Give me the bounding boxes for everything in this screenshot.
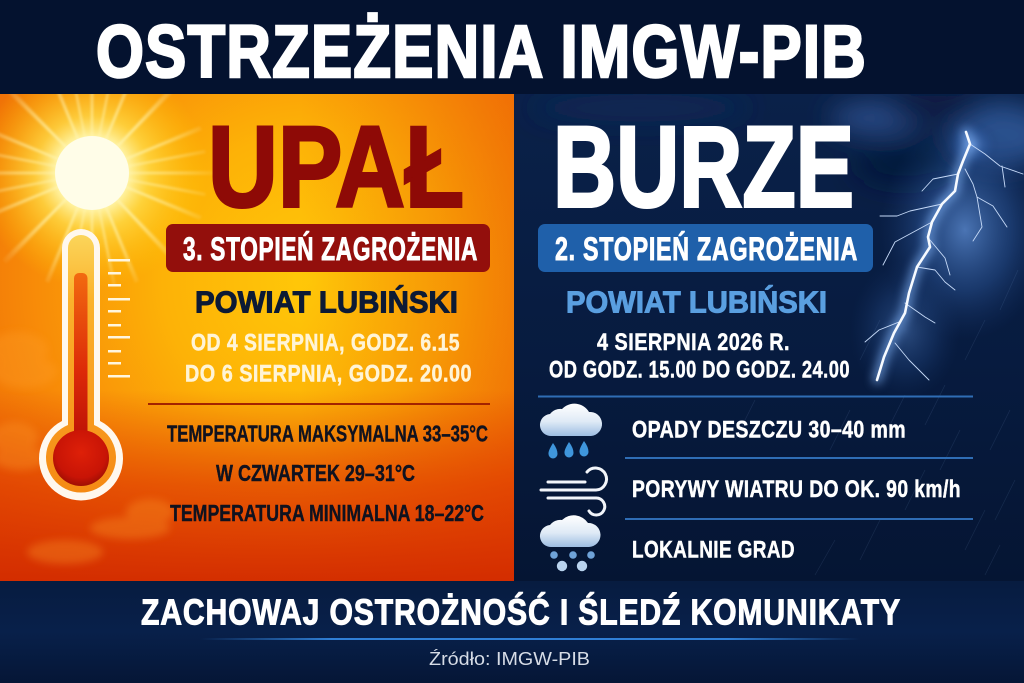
icon: thermometer xyxy=(39,229,130,500)
badge: level 2: 2. STOPIEŃ ZAGROŻENIA xyxy=(555,231,858,267)
opady text: OPADY DESZCZU 30–40 mm xyxy=(632,416,906,444)
footer call to action: ZACHOWAJ OSTROŻNOŚĆ I ŚLEDŹ KOMUNIKATY xyxy=(141,590,901,632)
storm dates xyxy=(549,329,850,384)
heat background xyxy=(0,94,514,581)
heat dates xyxy=(185,330,472,388)
lightning bolt xyxy=(865,132,1023,380)
icon: sun xyxy=(0,94,212,284)
title: OSTRZEŻENIA IMGW-PIB xyxy=(96,10,867,93)
temperature details: TEMPERATURA MAKSYMALNA 33–35°C xyxy=(167,420,488,446)
heat dates: OD 4 SIERPNIA, GODZ. 6.15 xyxy=(191,330,460,356)
source: Źródło: IMGW-PIB xyxy=(429,649,590,669)
footer band xyxy=(0,581,1024,683)
panel: storm warning xyxy=(514,94,1024,581)
temperature details xyxy=(167,420,488,526)
heat dates: DO 6 SIERPNIA, GODZ. 20.00 xyxy=(185,360,472,388)
hail text: LOKALNIE GRAD xyxy=(632,536,795,564)
badge: level 3: 3. STOPIEŃ ZAGROŻENIA xyxy=(183,231,478,267)
icon: hail cloud xyxy=(540,515,601,571)
temperature details: W CZWARTEK 29–31°C xyxy=(216,460,415,486)
icon: rain cloud xyxy=(540,404,602,459)
header band xyxy=(0,0,1024,94)
badge: level 3 xyxy=(166,224,490,272)
heading: burze: BURZE xyxy=(553,104,854,232)
icon: wind xyxy=(541,468,606,515)
heading: upal: UPAŁ xyxy=(208,104,464,232)
panel: heat warning xyxy=(0,50,514,581)
region name: POWIAT LUBIŃSKI xyxy=(566,284,827,320)
badge: level 2 xyxy=(538,224,873,272)
region name: POWIAT LUBIŃSKI xyxy=(195,284,458,320)
temperature details: TEMPERATURA MINIMALNA 18–22°C xyxy=(170,500,484,526)
storm background xyxy=(514,94,1024,581)
storm dates: OD GODZ. 15.00 DO GODZ. 24.00 xyxy=(549,356,850,384)
storm dates: 4 SIERPNIA 2026 R. xyxy=(597,329,790,356)
